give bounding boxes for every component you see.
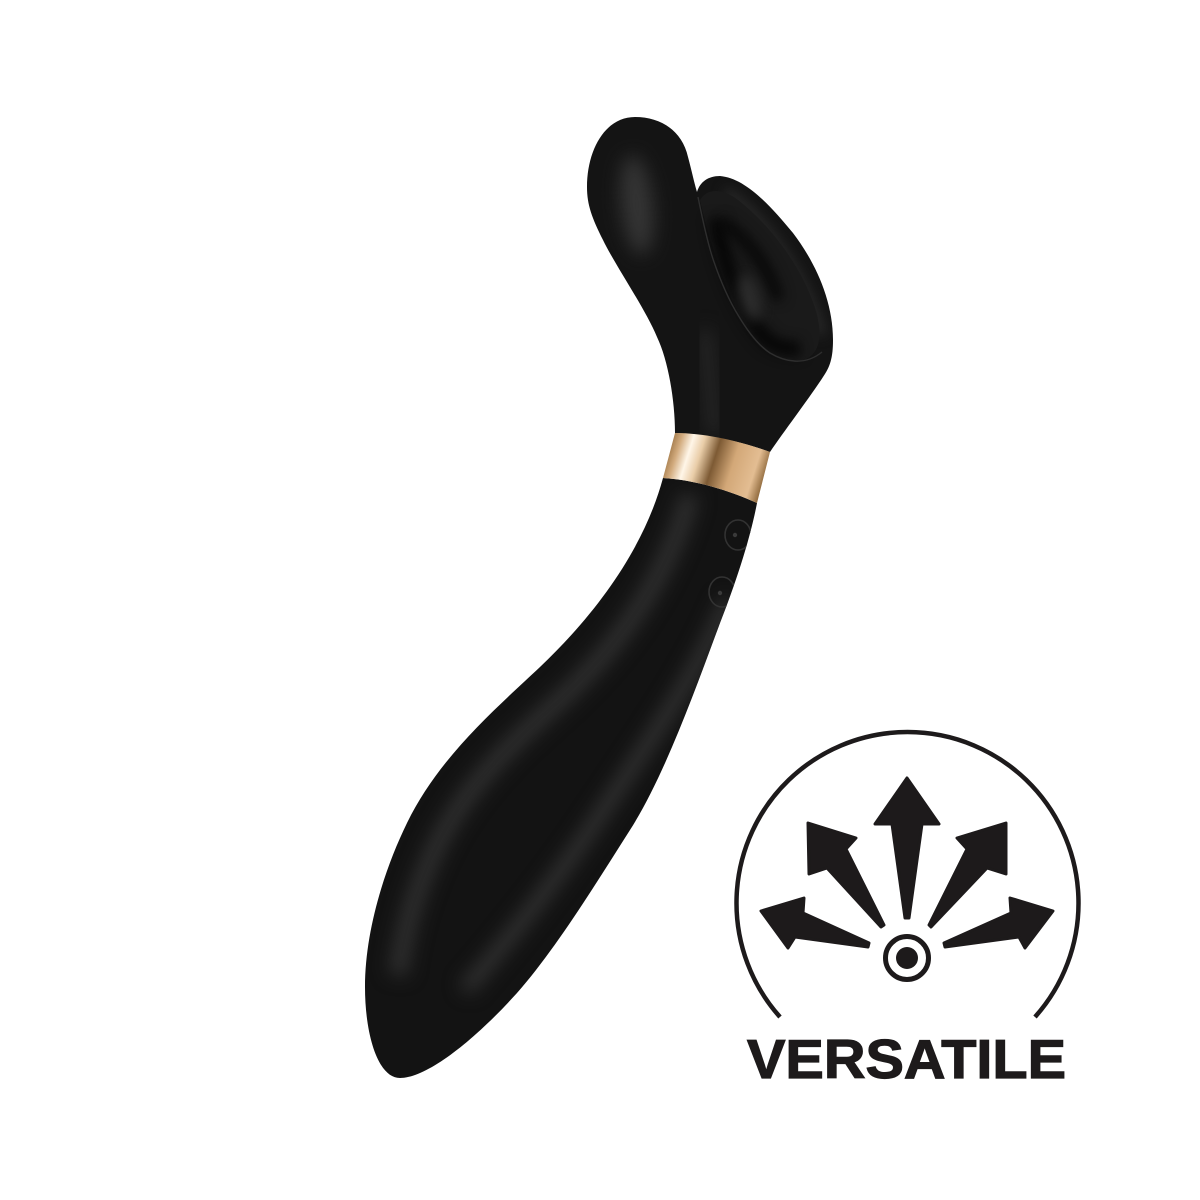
arrow right [944,898,1053,948]
arrows [761,778,1053,948]
body highlight lower [465,600,728,990]
product illustration [365,117,833,1078]
arrow up [875,778,939,918]
recess dark crescent [716,218,800,349]
left prong highlight [616,154,658,256]
badge label: VERSATILE [747,1028,1066,1090]
product body [365,478,757,1078]
versatile badge [736,732,1078,1090]
head and prong [587,117,833,452]
seam between prong and head [698,197,822,361]
recess inner glow [734,272,766,324]
neck highlight [705,330,714,435]
body highlight upper [398,495,690,975]
infographic canvas [365,117,1081,1080]
recess upper shadow [722,222,778,300]
head recess [698,191,822,361]
arrow up-left [808,823,884,927]
arrow up-right [929,823,1006,927]
rim sheen [725,192,822,335]
badge arc [736,732,1078,1017]
target icon [886,936,928,980]
buttons [709,520,751,607]
arrow left [761,898,869,948]
gold band [663,433,770,503]
